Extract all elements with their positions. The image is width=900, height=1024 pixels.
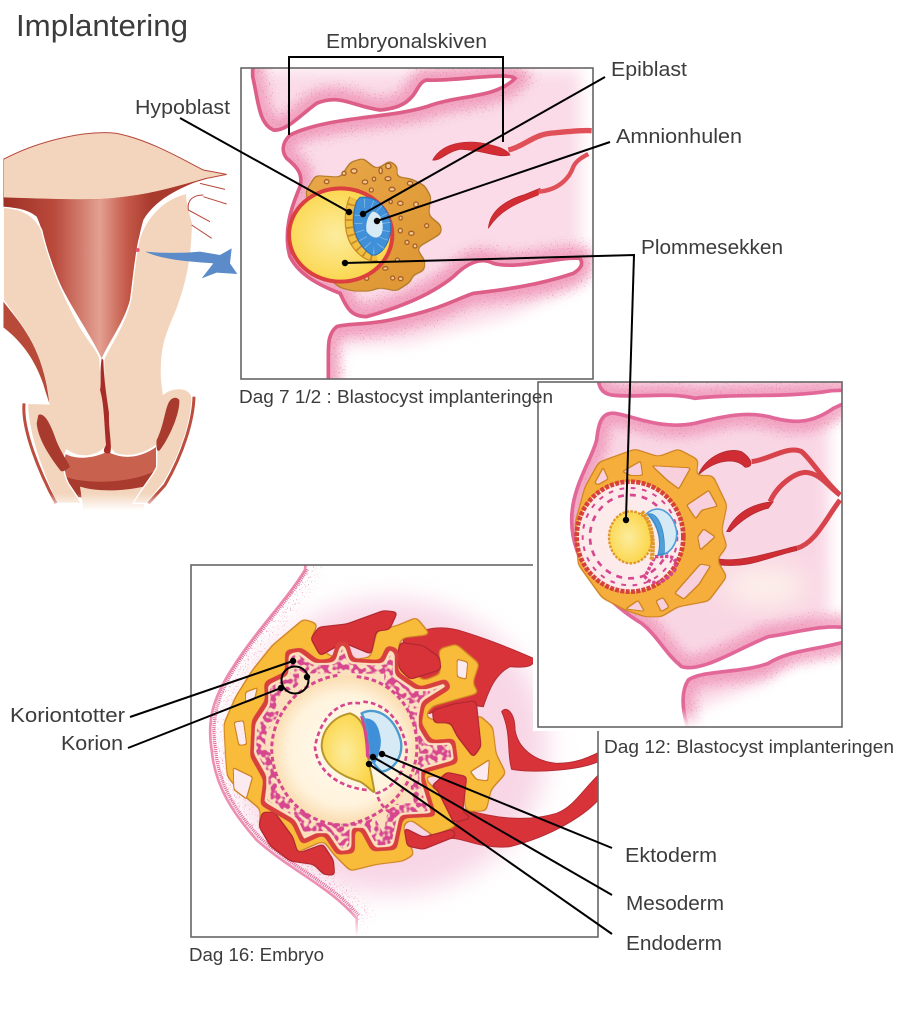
right fornix — [156, 398, 179, 451]
label: Koriontotter: Koriontotter — [10, 705, 125, 727]
yolk sac — [609, 511, 652, 563]
left wall and vaginal wall — [3, 207, 107, 503]
amniotic cavity — [366, 212, 383, 238]
blood over trophoblast — [258, 610, 482, 876]
label: Epiblast: Epiblast — [611, 59, 687, 81]
fundus — [3, 133, 227, 200]
lower uterine band — [64, 447, 156, 482]
label: Ektoderm: Ektoderm — [625, 845, 717, 867]
panel: Dag 7 1/2 blastocyst — [240, 67, 594, 380]
blastocyst wall and yolk sac — [289, 188, 392, 282]
label: Korion: Korion — [61, 733, 123, 755]
trophoblast ring — [574, 448, 728, 617]
label: Ektoderm — [379, 751, 717, 867]
label: Korion — [61, 685, 284, 755]
caption: Dag 7 1/2: Dag 7 1/2 : Blastocyst implanteringen — [239, 387, 553, 407]
epiblast — [354, 197, 391, 255]
left outer wall — [3, 302, 49, 403]
syncytiotrophoblast — [305, 158, 442, 292]
caption: Dag 16: Dag 16: Embryo — [189, 945, 324, 965]
title: Implantering — [16, 8, 188, 43]
label: Koriontotter — [10, 658, 310, 727]
vaginal outer edges — [24, 397, 194, 503]
uterine vessels — [698, 450, 797, 566]
label: Mesoderm — [370, 754, 724, 915]
label: Epiblast — [360, 59, 687, 217]
label: Mesoderm: Mesoderm — [626, 893, 724, 915]
label: Amnionhulen — [374, 126, 742, 224]
hypoblast — [349, 198, 377, 257]
lacunae — [233, 658, 490, 800]
trophoblast nuclei — [324, 163, 429, 281]
uterine vessels — [433, 142, 540, 228]
panel: Dag 16 embryo — [190, 564, 599, 938]
uterus illustration — [0, 133, 240, 511]
maternal blood lakes and vessels — [403, 628, 598, 847]
implantation site — [136, 248, 140, 252]
label: Embryonalskiven: Embryonalskiven — [326, 31, 487, 53]
exocoelom — [271, 676, 419, 824]
fallopian tube — [188, 183, 227, 238]
yolk sac — [322, 713, 374, 792]
left fornix — [37, 415, 70, 471]
label bracket: Embryonalskiven — [289, 31, 503, 142]
label: Hypoblast — [135, 97, 352, 215]
amnion — [362, 711, 401, 772]
label: Plommesekken: Plommesekken — [641, 237, 783, 259]
label: Amnionhulen: Amnionhulen — [616, 126, 742, 148]
outer trophoblast — [223, 617, 507, 872]
right wall and vaginal wall — [103, 193, 193, 503]
chorionic cavity — [577, 482, 683, 592]
embryonic disc — [365, 718, 381, 763]
label: Hypoblast: Hypoblast — [135, 97, 230, 119]
lacunae — [594, 460, 718, 613]
caption: Dag 12: Dag 12: Blastocyst implanteringen — [604, 737, 894, 757]
cervical canal — [100, 358, 111, 453]
label: Endoderm: Endoderm — [626, 933, 722, 955]
label: Plommesekken — [342, 237, 783, 523]
chorion lobes and villi — [250, 642, 458, 855]
amnion — [647, 509, 677, 555]
uterine cavity — [3, 177, 208, 358]
arrow — [145, 248, 237, 278]
label: Endoderm — [366, 761, 722, 955]
panel: Dag 12 blastocyst — [533, 381, 843, 731]
